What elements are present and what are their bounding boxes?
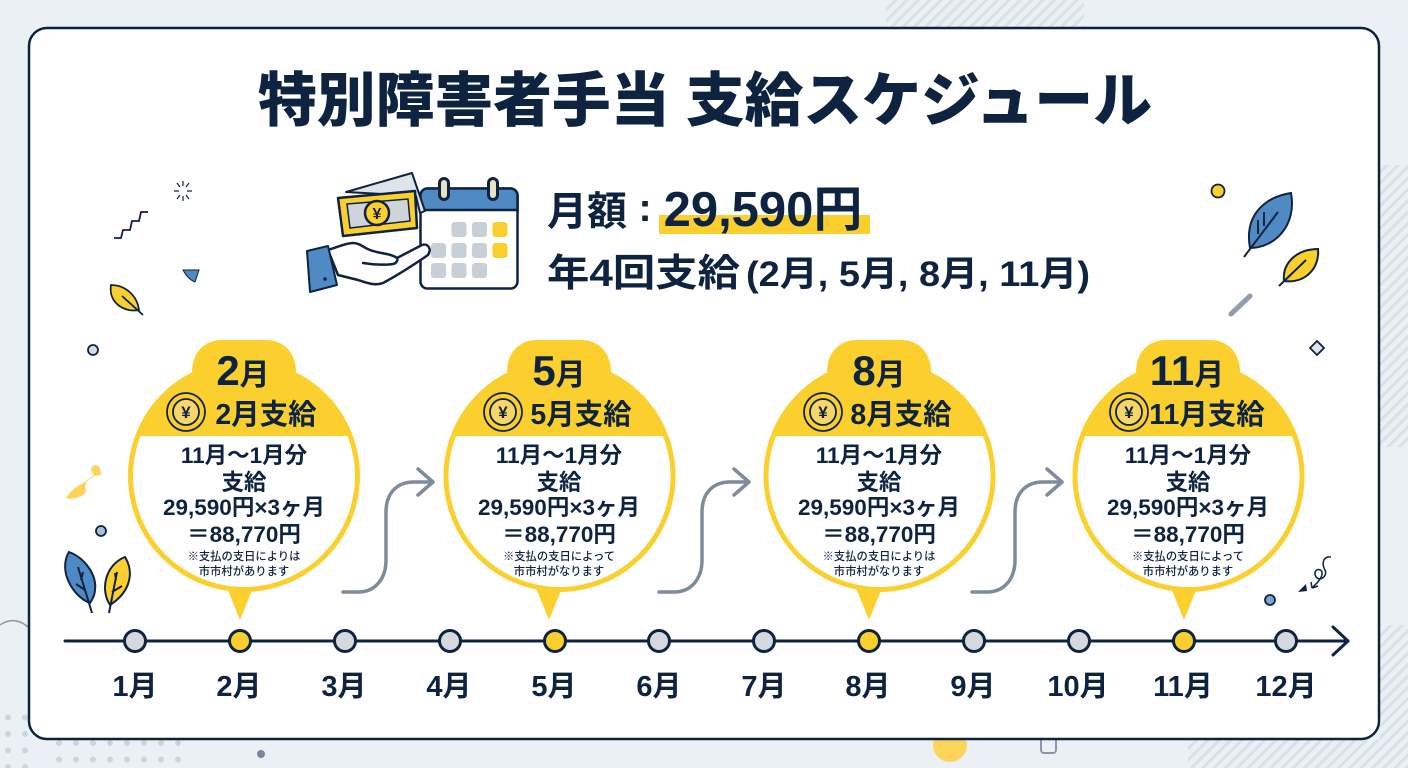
icon: coin: ¥ [181, 403, 191, 422]
monthly amount [547, 183, 870, 237]
month labels: 8月 [845, 671, 891, 703]
month labels: 11月 [1153, 671, 1213, 703]
payment details: 11月～1月分 [816, 443, 943, 468]
decoration: left doodles [66, 181, 199, 536]
payment label: 11月支給 [1149, 399, 1265, 431]
payment details: ※支払の支日によって [503, 549, 615, 563]
timeline nodes [124, 630, 1296, 652]
payment label: 2月支給 [215, 399, 317, 431]
payment details: ※支払の支日によりは [823, 549, 935, 563]
bubble shape [1072, 340, 1304, 620]
arrow: February to May [343, 469, 433, 592]
panel: May payment [444, 340, 676, 620]
payment details: 市市村がなります [834, 564, 924, 578]
month labels: 3月 [321, 671, 367, 703]
title: 特別障害者手当 支給スケジュール [258, 68, 1152, 134]
calendar [420, 178, 518, 288]
payment details [163, 443, 325, 578]
month labels: 5月 [531, 671, 577, 703]
payment details [798, 443, 960, 578]
payment details: ＝88,770円 [187, 522, 301, 547]
payment details: 11月～1月分 [496, 443, 623, 468]
monthly amount: : [638, 186, 652, 230]
month heading: 11月 [1150, 347, 1224, 394]
payment details: ＝88,770円 [822, 522, 936, 547]
timeline [65, 627, 1348, 703]
payment details: 市市村があります [1143, 564, 1233, 578]
payment details: 29,590円×3ヶ月 [1107, 495, 1269, 520]
decoration: right leaves and shapes [1212, 184, 1331, 605]
payment details: 29,590円×3ヶ月 [478, 495, 640, 520]
icon: coin [484, 393, 522, 431]
payment details: ＝88,770円 [1131, 522, 1245, 547]
month labels: 10月 [1047, 671, 1109, 703]
month labels [112, 671, 1317, 703]
month labels: 4月 [426, 671, 472, 703]
payment label: 5月支給 [530, 399, 632, 431]
payment details: 11月～1月分 [1125, 443, 1252, 468]
bubble shape [764, 340, 996, 620]
bubble shape [128, 340, 360, 620]
payment details: ＝88,770円 [502, 522, 616, 547]
payment details: 市市村がなります [514, 564, 604, 578]
month labels: 7月 [741, 671, 787, 703]
hand [307, 243, 430, 292]
icon: coin [804, 393, 842, 431]
icon: coin: ¥ [498, 403, 508, 422]
arrow: August to November [972, 469, 1062, 592]
panel: February payment [128, 340, 360, 620]
banknotes: ¥ [373, 206, 382, 223]
month labels: 9月 [950, 671, 996, 703]
monthly amount: 月額 [547, 190, 627, 234]
timeline axis arrow [65, 627, 1348, 655]
payment details: 支給 [536, 470, 582, 495]
payment details: 支給 [856, 470, 902, 495]
payment details [1107, 443, 1269, 578]
payment details: 市市村があります [199, 564, 289, 578]
month heading: 8月 [852, 347, 906, 394]
payment details: 11月～1月分 [181, 443, 308, 468]
panel: August payment [764, 340, 996, 620]
payment label: 8月支給 [850, 399, 952, 431]
panel: November payment [1072, 340, 1304, 620]
payment frequency [547, 253, 1090, 295]
monthly amount: 29,590円 [664, 183, 862, 237]
payment details: 29,590円×3ヶ月 [163, 495, 325, 520]
icon: coin: ¥ [1124, 403, 1134, 422]
payment details: 支給 [221, 470, 267, 495]
payment details: 支給 [1165, 470, 1211, 495]
month labels: 6月 [636, 671, 682, 703]
icon: hand with money and calendar [307, 173, 518, 292]
icon: coin [1110, 393, 1148, 431]
payment details: ※支払の支日によりは [188, 549, 300, 563]
decoration: bottom-left leaves [65, 552, 130, 613]
icon: coin [167, 393, 205, 431]
payment frequency: 年4回支給 [547, 253, 740, 295]
icon: coin: ¥ [818, 403, 828, 422]
arrow: May to August [659, 469, 749, 592]
bubble shape [444, 340, 676, 620]
payment details: 29,590円×3ヶ月 [798, 495, 960, 520]
month heading: 2月 [216, 347, 270, 394]
payment details [478, 443, 640, 578]
month labels: 1月 [112, 671, 158, 703]
month labels: 2月 [216, 671, 262, 703]
payment frequency: (2月, 5月, 8月, 11月) [746, 255, 1090, 294]
month heading: 5月 [532, 347, 586, 394]
banknotes [338, 173, 425, 236]
month labels: 12月 [1255, 671, 1317, 703]
payment details: ※支払の支日によって [1132, 549, 1244, 563]
